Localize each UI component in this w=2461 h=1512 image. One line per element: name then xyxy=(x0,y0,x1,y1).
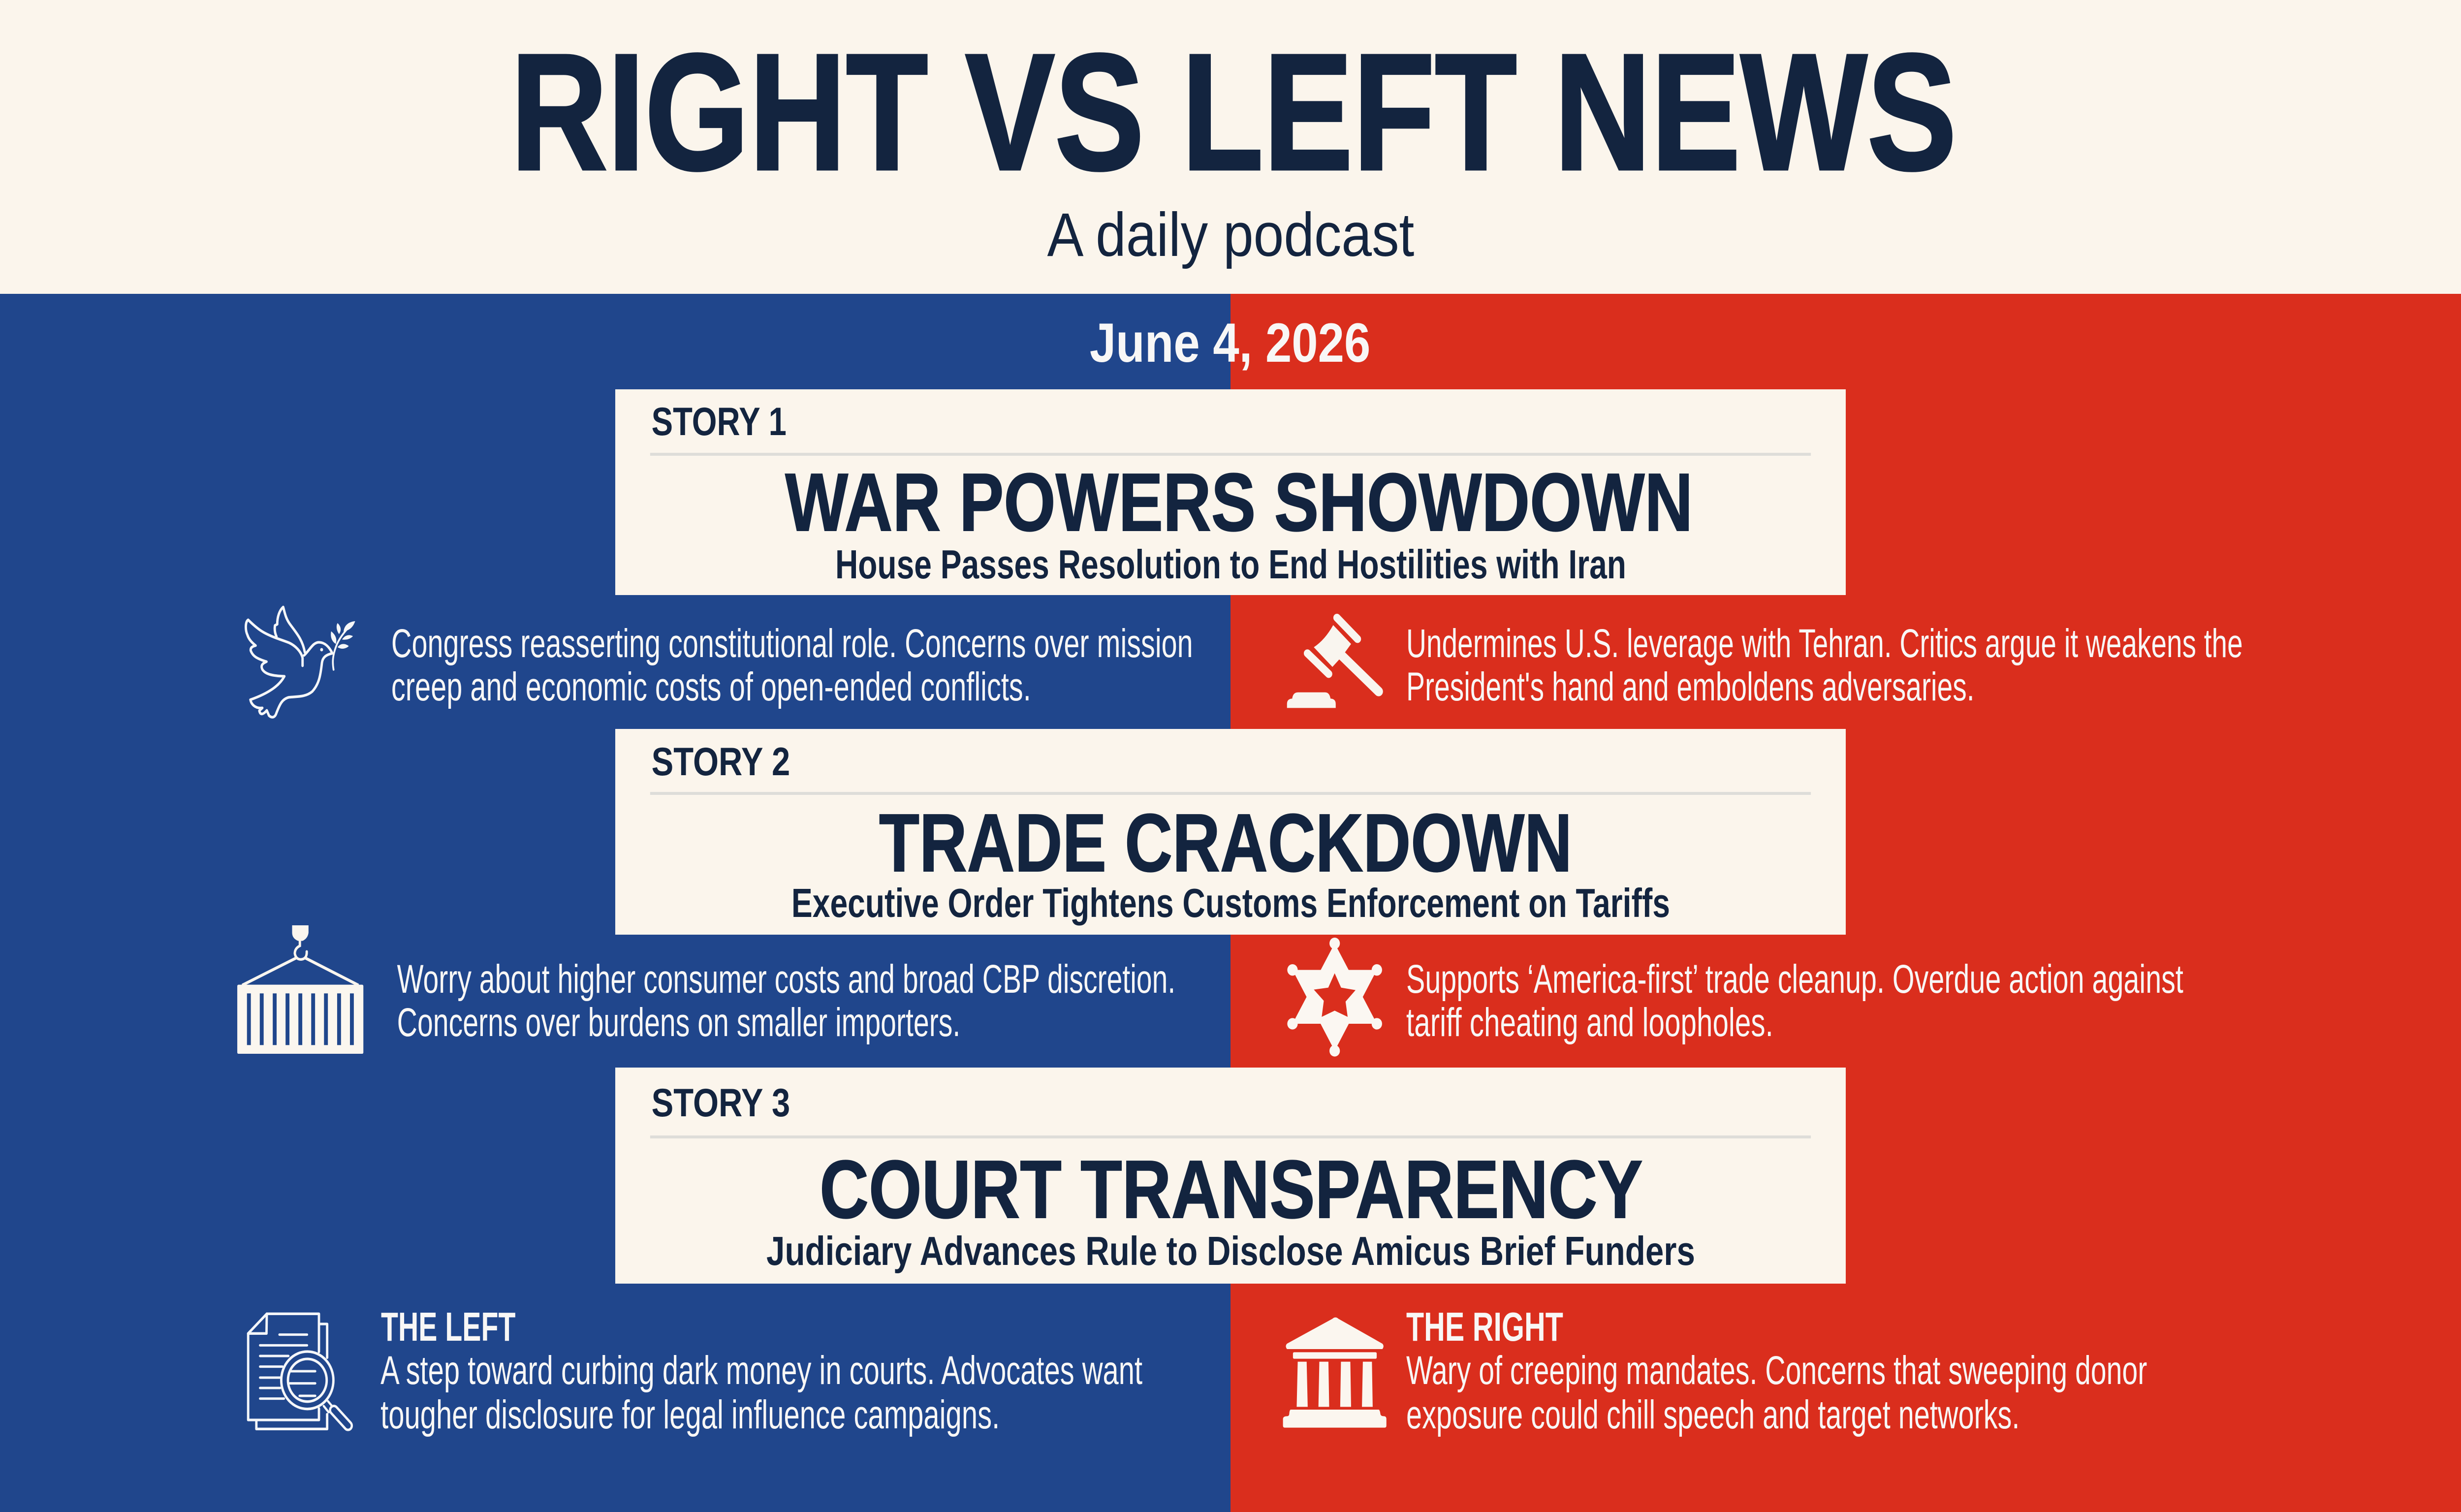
right opinion: story 2 xyxy=(1406,956,2183,1045)
story 2 subheading: Executive Order Tightens Customs Enforcement on Tariffs xyxy=(791,880,1670,926)
story 3 headline: COURT TRANSPARENCY xyxy=(820,1143,1643,1235)
title: RIGHT VS LEFT NEWS xyxy=(510,20,1956,205)
right column: the right label and opinion on story 3: THE RIGHT xyxy=(1406,1304,1563,1350)
icon: dove with olive branch xyxy=(246,607,355,717)
panel: story 2 card xyxy=(615,729,1846,935)
story 3 subheading: Judiciary Advances Rule to Disclose Amicus Brief Funders xyxy=(766,1228,1695,1274)
icon: sheriff star badge xyxy=(1287,938,1382,1057)
icon: courthouse with columns xyxy=(1283,1318,1387,1428)
story 2 headline: TRADE CRACKDOWN xyxy=(879,797,1572,889)
right column: the right label and opinion on story 3 xyxy=(1406,1304,2147,1437)
right column: the right label and opinion on story 3: Wary of creeping mandates. Concerns that sweeping donor xyxy=(1406,1348,2147,1393)
icon: gavel xyxy=(1287,618,1379,708)
panel: right side red background xyxy=(1230,294,2461,1512)
right column: the right label and opinion on story 3: exposure could chill speech and target networks. xyxy=(1406,1392,2019,1437)
left opinion: story 2: Concerns over burdens on smaller importers. xyxy=(397,1000,960,1045)
right opinion: story 2: Supports ‘America-first’ trade cleanup. Overdue action against xyxy=(1406,956,2183,1002)
panel: story 3 card xyxy=(615,1068,1846,1284)
left opinion: story 2 xyxy=(397,956,1175,1045)
right opinion: story 1 xyxy=(1406,621,2243,709)
left column: the left label and opinion on story 3 xyxy=(380,1304,1142,1437)
right opinion: story 2: tariff cheating and loopholes. xyxy=(1406,1000,1773,1045)
story 1 label: STORY 1 xyxy=(652,400,787,444)
left opinion: story 2: Worry about higher consumer costs and broad CBP discretion. xyxy=(397,956,1175,1002)
left opinion: story 1: Congress reasserting constitutional role. Concerns over mission xyxy=(391,621,1193,666)
subtitle: A daily podcast xyxy=(1047,201,1414,269)
date: June 4, 2026 xyxy=(1090,312,1370,374)
left column: the left label and opinion on story 3: THE LEFT xyxy=(381,1304,515,1350)
left opinion: story 1 xyxy=(391,621,1193,709)
left column: the left label and opinion on story 3: A step toward curbing dark money in courts. Advocates want xyxy=(380,1348,1142,1393)
icon: shipping container on crane hook xyxy=(237,925,363,1054)
left column: the left label and opinion on story 3: tougher disclosure for legal influence campaigns. xyxy=(380,1392,1000,1437)
story 2 label: STORY 2 xyxy=(652,740,790,784)
panel: left side blue background xyxy=(0,294,1230,1512)
icon: documents under magnifying glass xyxy=(248,1314,348,1429)
right opinion: story 1: President's hand and emboldens adversaries. xyxy=(1406,664,1975,709)
story 1 headline: WAR POWERS SHOWDOWN xyxy=(785,456,1693,548)
story 1 subheading: House Passes Resolution to End Hostilities with Iran xyxy=(835,541,1626,587)
panel: story 1 card xyxy=(615,389,1846,595)
story 3 label: STORY 3 xyxy=(652,1081,790,1125)
left opinion: story 1: creep and economic costs of open-ended conflicts. xyxy=(391,664,1031,709)
